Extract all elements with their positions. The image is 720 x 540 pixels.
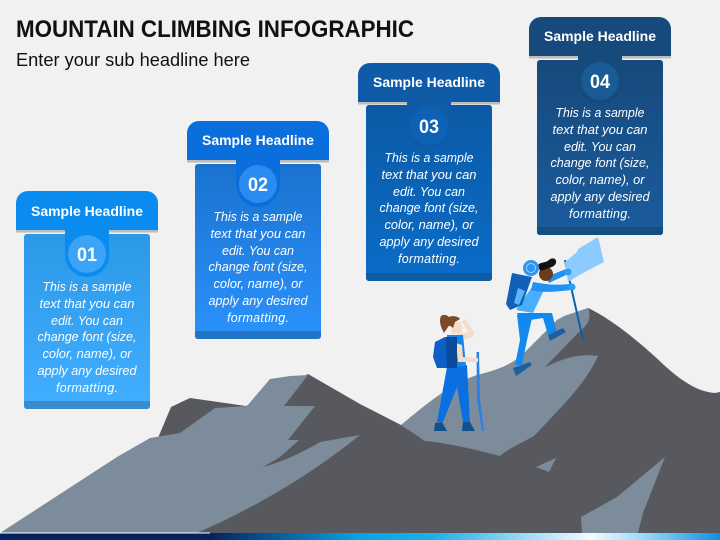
dark mountain mass (158, 308, 720, 533)
light central slope (401, 308, 598, 456)
body text: change font (size, (208, 260, 308, 274)
hair (538, 258, 556, 271)
body text: apply any desired (380, 235, 480, 249)
header shadow (358, 102, 500, 104)
headline text: Sample Headline (202, 132, 314, 148)
number badge: 02 (248, 175, 268, 196)
shoes (513, 328, 566, 376)
body text: apply any desired (38, 364, 138, 378)
mountain illustration (0, 308, 720, 533)
body text: color, name), or (42, 347, 132, 361)
flag (565, 237, 604, 282)
number badge: 04 (590, 72, 610, 93)
title: MOUNTAIN CLIMBING INFOGRAPHIC (16, 16, 414, 43)
back leg (515, 315, 532, 365)
lower right rock face (581, 457, 665, 533)
number badge: 01 (77, 245, 97, 266)
flag pole (564, 260, 584, 340)
bottom gradient bar (0, 532, 720, 540)
card body (195, 164, 321, 339)
card footer band (537, 227, 663, 235)
header shadow (187, 160, 329, 162)
body text: text that you can (552, 123, 648, 137)
body text (380, 151, 480, 266)
body text: change font (size, (38, 330, 136, 344)
body text: formatting. (227, 311, 289, 325)
raised arm (457, 319, 474, 341)
lower arm (456, 343, 478, 362)
upper arm (546, 269, 568, 283)
card footer band (195, 331, 321, 339)
boots (434, 422, 475, 431)
lower arm (531, 282, 571, 292)
light left slope (0, 375, 360, 533)
figure: climber with flag (506, 237, 604, 376)
body text: change font (size, (550, 156, 650, 170)
body text: color, name), or (556, 173, 645, 187)
body text: This is a sample (384, 151, 474, 165)
card 3 (358, 63, 500, 281)
body text: text that you can (210, 227, 306, 241)
body text: edit. You can (393, 185, 465, 199)
head (450, 320, 462, 334)
card footer band (366, 273, 492, 281)
headline tab (187, 121, 329, 207)
subtitle: Enter your sub headline here (16, 50, 250, 70)
card body (537, 60, 663, 235)
header shadow (16, 230, 158, 232)
body text: This is a sample (556, 106, 645, 120)
body text: formatting. (569, 207, 631, 221)
body text (38, 280, 138, 395)
card 1 (16, 191, 158, 409)
hair (440, 315, 460, 333)
number badge (410, 107, 448, 145)
torso (516, 287, 545, 313)
body text: formatting. (398, 252, 460, 266)
headline tab (529, 17, 671, 103)
number badge: 03 (419, 117, 439, 138)
card 4 (529, 17, 671, 235)
body text: text that you can (40, 297, 135, 311)
card body (24, 234, 150, 409)
headline tab (16, 191, 158, 277)
card 2 (187, 121, 329, 339)
number badge (239, 165, 277, 203)
body text: apply any desired (550, 190, 651, 204)
body text: color, name), or (214, 277, 303, 291)
walking stick (476, 352, 484, 431)
head (539, 267, 553, 281)
legs (437, 365, 470, 422)
body text: apply any desired (208, 294, 309, 308)
body text: edit. You can (222, 244, 294, 258)
small rock highlight (536, 458, 556, 472)
figure: hiker with walking stick (433, 315, 484, 431)
number badge (581, 62, 619, 100)
body text: edit. You can (51, 314, 123, 328)
header shadow (529, 56, 671, 58)
headline tab (358, 63, 500, 149)
backpack (433, 337, 457, 368)
number badge (68, 235, 106, 273)
body text: formatting. (56, 381, 118, 395)
bedroll (523, 260, 539, 276)
body text (208, 210, 309, 325)
body text: This is a sample (42, 280, 132, 294)
body text: edit. You can (564, 140, 636, 154)
hands (564, 268, 572, 276)
card body (366, 105, 492, 281)
card footer band (24, 401, 150, 409)
headline text: Sample Headline (373, 74, 485, 90)
body text (550, 106, 651, 221)
torso (447, 335, 466, 368)
headline text: Sample Headline (544, 28, 656, 44)
body text: text that you can (382, 168, 477, 182)
body text: change font (size, (380, 201, 478, 215)
front leg (517, 313, 557, 335)
body text: This is a sample (214, 210, 303, 224)
body text: color, name), or (384, 218, 474, 232)
backpack (506, 273, 532, 310)
headline text: Sample Headline (31, 203, 143, 219)
